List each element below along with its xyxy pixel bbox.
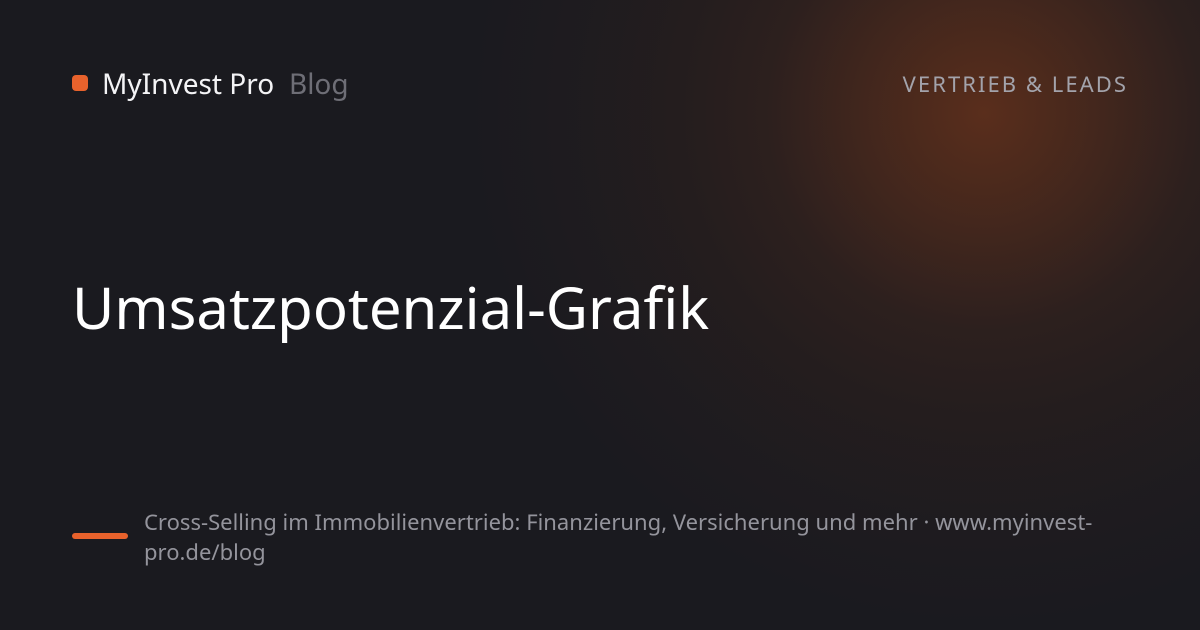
subtitle: [144, 507, 1092, 567]
title: Umsatzpotenzial-Grafik: [72, 267, 709, 346]
subtitle: pro.de/blog: [144, 537, 266, 567]
brand name: MyInvest Pro: [102, 65, 274, 103]
accent bar: [72, 533, 128, 539]
category label: VERTRIEB & LEADS: [903, 69, 1128, 99]
subtitle: Cross-Selling im Immobilienvertrieb: Finanzierung, Versicherung und mehr · www.myinvest-: [144, 507, 1092, 537]
brand suffix: Blog: [289, 65, 349, 103]
icon: brand square: [72, 75, 88, 91]
